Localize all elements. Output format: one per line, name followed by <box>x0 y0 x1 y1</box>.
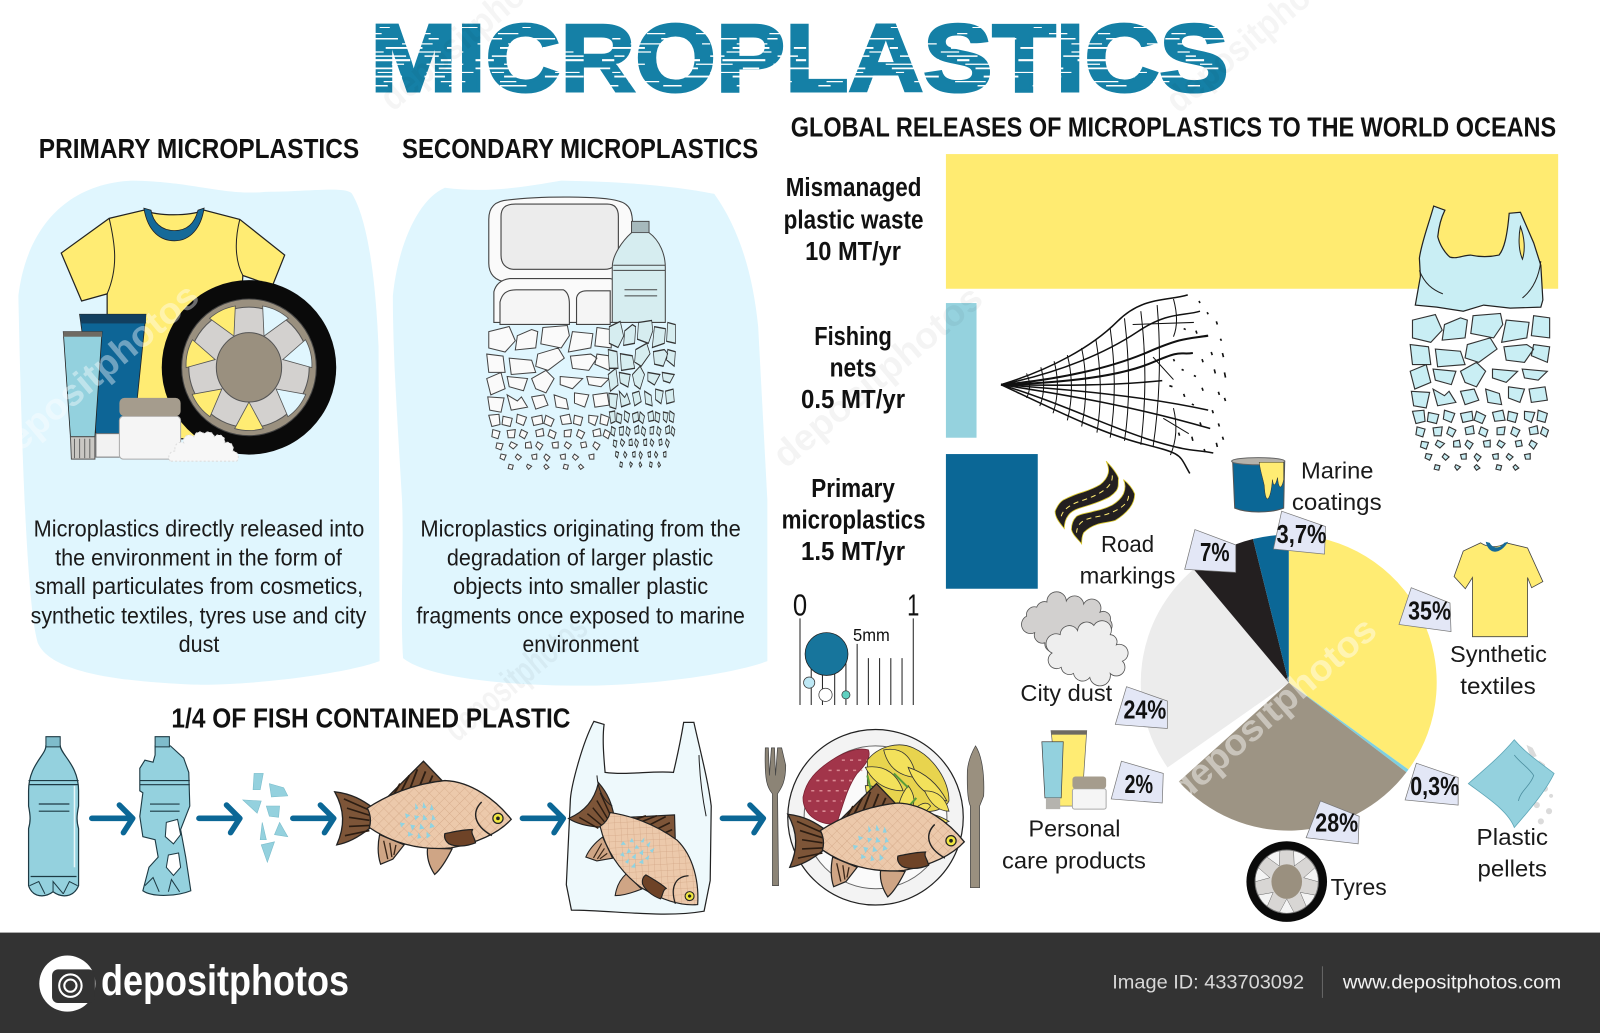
percentage tag: 28%: 28% <box>1315 810 1358 838</box>
panel: primary microplastics background <box>18 181 380 685</box>
arrow <box>199 805 240 833</box>
percentage tag: 3,7% <box>1273 511 1327 554</box>
slice: plastic pellets 0.3% <box>1289 683 1408 772</box>
percentage tag: 7% <box>1185 530 1236 572</box>
label: road markings <box>1080 531 1176 589</box>
icon: blue tube <box>80 314 146 457</box>
percentage tag: 2% <box>1111 761 1163 803</box>
label: road markings: markings <box>1080 563 1176 589</box>
panel: secondary microplastics background <box>393 181 767 686</box>
percentage tag: 24%: 24% <box>1123 696 1166 724</box>
percentage tag: 3,7%: 3,7% <box>1277 521 1327 549</box>
heading: primary microplastics: PRIMARY MICROPLASTICS <box>39 133 359 164</box>
percentage tag: 35% <box>1399 588 1451 632</box>
label: plastic pellets: pellets <box>1478 855 1547 881</box>
icon: plate with fish and food <box>788 730 964 905</box>
text block: primary definition: the environment in the form of <box>55 544 342 570</box>
icon: size scale 0-1: 0 <box>793 588 807 622</box>
label: mismanaged plastic waste: 10 MT/yr <box>805 238 901 266</box>
arrow <box>522 805 563 833</box>
icon: knife <box>967 746 984 888</box>
icon: camera logo <box>39 956 95 1012</box>
label: marine coatings <box>1292 458 1382 515</box>
icon: food container <box>489 197 633 324</box>
label: synthetic textiles: Synthetic <box>1450 641 1547 667</box>
label: fishing nets: 0.5 MT/yr <box>801 386 905 414</box>
icon: plastic pellets bag <box>1468 740 1554 828</box>
text block: primary definition: Microplastics directly released into <box>34 516 364 542</box>
percentage tag: 35%: 35% <box>1408 597 1451 625</box>
label: marine coatings: Marine <box>1301 458 1373 484</box>
text block: secondary definition: objects into smaller plastic <box>453 573 708 599</box>
icon: paint bucket <box>1232 458 1285 512</box>
bottle fragments <box>608 320 675 467</box>
footer image id: Image ID: 433703092 <box>1112 972 1304 994</box>
footer url: www.depositphotos.com <box>1342 972 1561 994</box>
text block: secondary definition: degradation of larger plastic <box>447 544 714 570</box>
bar: fishing nets <box>946 303 977 438</box>
footer logo <box>39 956 349 1012</box>
text block: primary definition <box>31 516 367 657</box>
bar: mismanaged plastic waste <box>946 154 1558 289</box>
icon: broken bottle <box>140 737 191 895</box>
label: mismanaged plastic waste <box>784 174 923 266</box>
icon: personal care products <box>1042 731 1106 809</box>
icon: yellow t-shirt <box>61 208 285 439</box>
text block: primary definition: dust <box>179 631 220 657</box>
label: mismanaged plastic waste: plastic waste <box>784 207 923 235</box>
slice: city dust 24% <box>1141 569 1289 768</box>
label: marine coatings: coatings <box>1292 489 1382 515</box>
icon: size scale 0-1: 5mm <box>853 625 890 645</box>
icon: fish with microplastics <box>335 761 511 874</box>
icon: intact bottle <box>29 737 79 896</box>
footer bar <box>0 933 1600 1033</box>
food: red beans <box>803 749 869 824</box>
arrow <box>293 805 334 833</box>
arrow <box>722 805 763 833</box>
percentage tag: 0,3% <box>1405 763 1459 805</box>
text block: primary definition: synthetic textiles, tyres use and city <box>31 602 367 628</box>
label: plastic pellets <box>1477 824 1548 881</box>
icon: road markings <box>1055 461 1135 544</box>
label: mismanaged plastic waste: Mismanaged <box>786 174 921 202</box>
slice: road markings 7% <box>1194 539 1289 683</box>
icon: tyre <box>162 280 336 455</box>
label: plastic pellets: Plastic <box>1477 824 1548 850</box>
icon: size scale 0-1 <box>793 588 919 705</box>
text block: secondary definition: environment <box>522 631 639 657</box>
icon: city dust clouds <box>1021 592 1128 686</box>
icon: water bottle <box>612 221 665 322</box>
icon: cream jar <box>119 398 181 459</box>
label: synthetic textiles <box>1450 641 1547 699</box>
text block: secondary definition: Microplastics originating from the <box>420 516 741 542</box>
label: fishing nets <box>801 323 905 414</box>
label: primary microplastics <box>782 475 926 566</box>
percentage tag: 7%: 7% <box>1200 539 1230 567</box>
icon: secondary microplastics sources <box>487 197 675 469</box>
icon: fishing net <box>1001 295 1226 473</box>
icon: light blue tube <box>63 332 102 459</box>
percentage tag: 24% <box>1115 687 1167 729</box>
icon: small t-shirt <box>1454 542 1543 637</box>
bar: primary microplastics <box>946 454 1038 589</box>
label: synthetic textiles: textiles <box>1460 673 1536 699</box>
food: yellow pickles <box>865 745 949 825</box>
label: tyres: Tyres <box>1331 874 1387 900</box>
text: depositphotos <box>1161 608 1384 810</box>
icon: fork <box>765 748 786 886</box>
label: primary microplastics: 1.5 MT/yr <box>801 538 905 566</box>
label: primary microplastics: microplastics <box>782 507 926 535</box>
heading: fish contained plastic: 1/4 OF FISH CONTAINED PLASTIC <box>171 703 571 734</box>
icon: fish in plastic bag <box>550 721 732 941</box>
slice: marine coatings 3.7% <box>1253 535 1289 683</box>
text block: secondary definition <box>416 516 745 657</box>
text block: secondary definition: fragments once exposed to marine <box>416 602 745 628</box>
slice: synthetic textiles 35% <box>1289 535 1437 770</box>
icon: primary microplastics sources <box>61 208 336 461</box>
label: personal care products: care products <box>1002 847 1146 873</box>
label: personal care products <box>1002 816 1146 873</box>
icon: size scale 0-1: 1 <box>907 588 919 622</box>
title: MICROPLASTICS <box>370 5 1229 112</box>
icon: small tyre <box>1246 841 1327 922</box>
pie chart: microplastic sources <box>1141 535 1437 831</box>
label: road markings: Road <box>1101 531 1154 557</box>
percentage tag: 0,3%: 0,3% <box>1410 773 1459 801</box>
label: personal care products: Personal <box>1029 816 1120 842</box>
container fragments <box>487 325 611 469</box>
icon: plastic bag fragmenting <box>1410 206 1550 470</box>
footer logo: depositphotos <box>101 957 349 1005</box>
text: depositphotos <box>765 277 990 475</box>
percentage tag: 28% <box>1306 801 1359 844</box>
label: primary microplastics: Primary <box>811 475 896 503</box>
label: fishing nets: Fishing <box>814 323 892 351</box>
icon: white particles <box>169 432 238 461</box>
heading: secondary microplastics: SECONDARY MICROPLASTICS <box>402 133 758 164</box>
slice: tyres 28% <box>1179 683 1406 831</box>
text: depositphotos <box>436 606 595 749</box>
percentage tag: 2%: 2% <box>1124 771 1153 799</box>
label: fishing nets: nets <box>830 355 877 383</box>
label: city dust: City dust <box>1020 680 1113 706</box>
text block: primary definition: small particulates from cosmetics, <box>35 573 363 599</box>
arrow <box>92 805 133 833</box>
icon: plastic fragments <box>243 773 288 862</box>
